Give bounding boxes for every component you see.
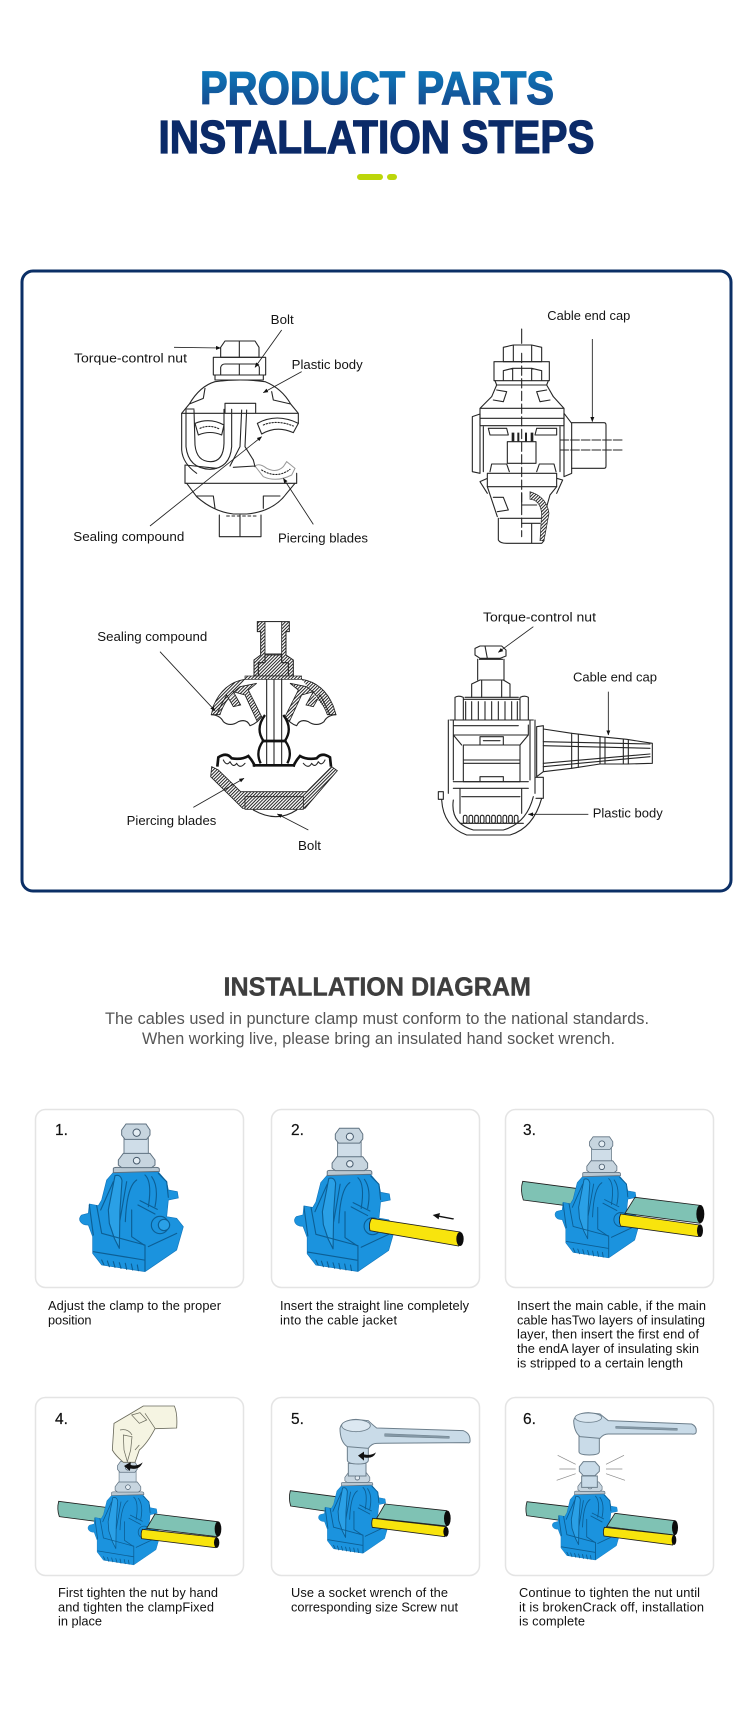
leader arrow [591,339,594,422]
step number: 4. [55,1411,68,1428]
title line: product parts: PRODUCT PARTS [200,62,554,114]
step text: Insert the main cable, if the main [517,1298,706,1313]
step number: 2. [291,1122,304,1139]
label: bolt: Bolt [271,312,294,327]
diagram: clamp with cone end cap [438,610,663,835]
step number: 3. [523,1122,536,1139]
green cable rear [58,1501,106,1523]
icon: broken nut [579,1462,599,1487]
step text [517,1298,706,1370]
green cable rear [289,1491,336,1513]
step text: the endA layer of insulating skin [517,1341,699,1356]
step text: Use a socket wrench of the [291,1585,448,1600]
label: sealing compound: Sealing compound [73,529,184,544]
step number: 6. [523,1411,536,1428]
icon: clamp [552,1482,621,1560]
step number: 5. [291,1411,304,1428]
intro text: The cables used in puncture clamp must conform to the national standards. [105,1009,649,1028]
icon: clamp [80,1124,183,1272]
panel: product parts [22,271,731,891]
title [158,62,594,163]
step text [519,1585,704,1629]
label: plastic body: Plastic body [292,357,363,372]
break rays [557,1455,625,1480]
label: torque-control nut: Torque-control nut [483,610,596,625]
step text: Continue to tighten the nut until [519,1585,700,1600]
icon: clamp [555,1137,640,1258]
step text: Insert the straight line completely [280,1298,470,1313]
intro text: When working live, please bring an insulated hand socket wrench. [142,1029,615,1048]
step text: cable hasTwo layers of insulating [517,1312,705,1327]
arrow: tighten by hand [124,1462,143,1471]
step text [58,1585,218,1629]
icon: clamp [88,1461,161,1565]
step text: Adjust the clamp to the proper [48,1298,222,1313]
step text: is complete [519,1614,585,1629]
label: piercing blades: Piercing blades [127,813,217,828]
accent mark [357,174,397,180]
intro text [105,1009,649,1048]
label: piercing blades: Piercing blades [278,531,369,546]
clamp drawing [438,646,652,835]
clamp drawing [211,622,337,817]
icon: socket wrench [574,1413,696,1455]
step text: corresponding size Screw nut [291,1599,458,1614]
step text [280,1298,470,1327]
arrow: insert direction [433,1213,454,1220]
panel: step 2 [272,1110,480,1327]
card [272,1110,480,1288]
label: plastic body: Plastic body [593,806,663,821]
icon: socket wrench [340,1419,470,1476]
cables front [372,1504,451,1537]
cables front [603,1513,678,1545]
cables front [619,1197,704,1237]
card [506,1398,714,1576]
step text: into the cable jacket [280,1312,397,1327]
leader lines [498,627,608,814]
step text: in place [58,1614,102,1629]
card [36,1398,244,1576]
card [36,1110,244,1288]
label: bolt: Bolt [298,838,321,853]
panel: step 6 [506,1398,714,1629]
label: torque-control nut: Torque-control nut [74,351,187,366]
leader lines [160,652,308,830]
heading: installation diagram: INSTALLATION DIAGRAM [224,972,531,1002]
card [272,1398,480,1576]
step text: is stripped to a certain length [517,1355,683,1370]
step number: 1. [55,1122,68,1139]
step text: First tighten the nut by hand [58,1585,218,1600]
diagram: clamp front view [73,312,369,546]
green cable rear [521,1181,578,1207]
icon: gloved hand [112,1406,177,1462]
yellow cable [369,1218,464,1246]
step text: and tighten the clampFixed [58,1599,214,1614]
panel: step 5 [272,1398,480,1614]
clamp drawing [182,341,298,537]
icon: clamp [319,1473,389,1553]
green cable rear [526,1502,569,1522]
diagram: clamp side view [472,308,630,543]
title line: installation steps: INSTALLATION STEPS [158,111,594,163]
arrow: wrench rotation [358,1452,376,1461]
step text: it is brokenCrack off, installation [519,1599,704,1614]
step text [291,1585,458,1614]
label: sealing compound: Sealing compound [97,629,207,644]
step text [48,1298,222,1327]
step text: layer, then insert the first end of [517,1327,699,1342]
clamp drawing [472,329,623,543]
card [506,1110,714,1288]
step text: position [48,1312,92,1327]
diagram: clamp cross-section [97,622,337,853]
icon: clamp [295,1128,395,1272]
panel: step 4 [36,1398,244,1629]
label: cable end cap: Cable end cap [573,670,657,685]
panel: step 1 [36,1110,244,1327]
panel: step 3 [506,1110,714,1370]
label: cable end cap: Cable end cap [547,308,630,323]
cables front [141,1514,221,1548]
leader lines [150,330,313,526]
